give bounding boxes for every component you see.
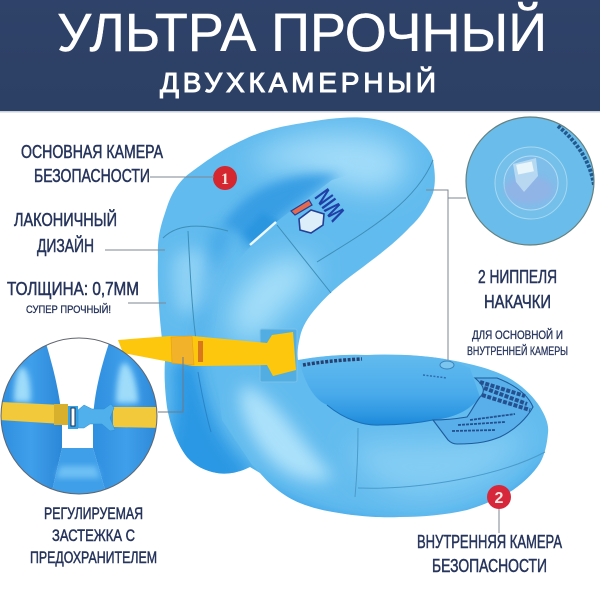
badge 1 [213, 166, 237, 190]
label: main chamber: БЕЗОПАСНОСТИ [34, 166, 150, 186]
label: valves: ДЛЯ ОСНОВНОЙ И [472, 327, 563, 342]
label: main chamber: ОСНОВНАЯ КАМЕРА [21, 142, 163, 162]
label: adjustable buckle [30, 504, 157, 567]
label: laconic design [14, 209, 117, 256]
yellow strap [118, 332, 296, 376]
leader lines [105, 177, 499, 533]
label: valves [467, 267, 568, 358]
inset: nipple [466, 117, 594, 245]
lower connector [52, 448, 105, 494]
printed info panel [433, 378, 533, 444]
rear chamber and arch shadow [158, 174, 340, 495]
right pillar [93, 344, 156, 489]
strap [2, 402, 54, 424]
edge shading [140, 108, 260, 200]
strap buckle [171, 336, 194, 365]
label: adjustable buckle: ПРЕДОХРАНИТЕЛЕМ [30, 548, 157, 567]
label: laconic design: ДИЗАЙН [37, 235, 94, 256]
inset: buckle detail [0, 338, 160, 500]
label: adjustable buckle: РЕГУЛИРУЕМАЯ [44, 504, 143, 523]
label: inner chamber: БЕЗОПАСНОСТИ [432, 556, 547, 576]
seams [163, 160, 545, 497]
illustration: inflatable float [118, 108, 560, 540]
label: valves: НАКАЧКИ [484, 292, 551, 312]
header banner [0, 0, 600, 112]
ring inner well [299, 355, 480, 425]
white sliver highlight [250, 222, 276, 245]
logo [291, 184, 351, 233]
badge 2 [487, 485, 511, 509]
title: УЛЬТРА ПРОЧНЫЙ [57, 2, 547, 63]
label: thickness: СУПЕР ПРОЧНЫЙ! [26, 303, 111, 316]
label: valves: 2 НИППЕЛЯ [478, 267, 557, 287]
label: laconic design: ЛАКОНИЧНЫЙ [14, 209, 117, 230]
strap patch [260, 329, 297, 382]
label: thickness [7, 279, 139, 316]
plastic buckle [68, 406, 78, 429]
logo: WIN [310, 184, 351, 225]
light shading [250, 134, 406, 192]
badge 1: 1 [221, 171, 229, 188]
label: adjustable buckle: ЗАСТЕЖКА С [52, 526, 135, 545]
label: valves: ВНУТРЕННЕЙ КАМЕРЫ [467, 343, 568, 358]
label: inner chamber [417, 532, 562, 576]
label: thickness: ТОЛЩИНА: 0,7ММ [7, 279, 139, 299]
left pillar [2, 346, 62, 489]
badge 2: 2 [495, 490, 504, 507]
subtitle: ДВУХКАМЕРНЫЙ [160, 67, 436, 98]
label: main chamber [21, 142, 163, 186]
